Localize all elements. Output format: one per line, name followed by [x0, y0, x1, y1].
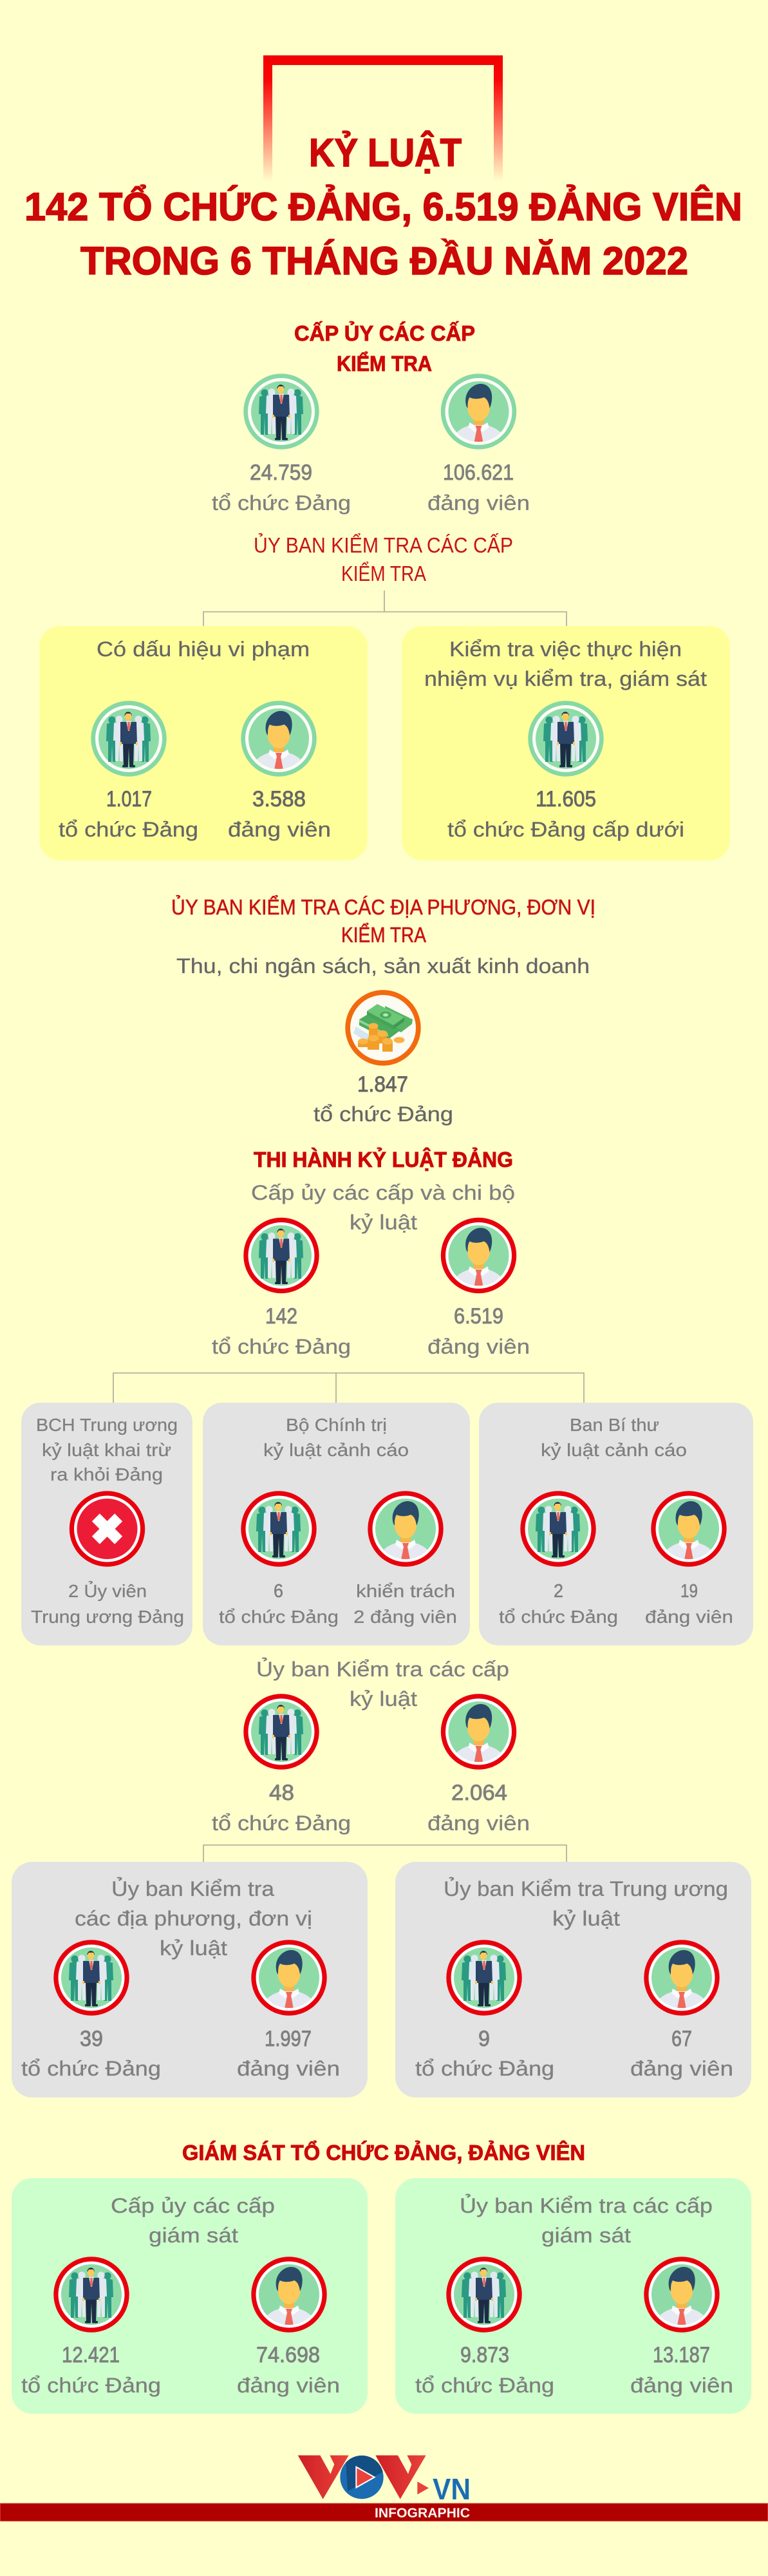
subheading	[251, 1181, 515, 1234]
stat: 1.017: tổ chức Đảng	[59, 818, 198, 841]
subheading: ủy ban kiểm tra các cấp: ỦY BAN KIỂM TRA CÁC CẤP	[254, 533, 513, 557]
stat: 106.621: 106.621	[443, 460, 514, 485]
stat: 1.997: 1.997	[265, 2027, 312, 2051]
stat: 6: tổ chức Đảng	[219, 1607, 339, 1627]
panel title	[263, 1415, 409, 1460]
stat: 2 ủy viên: Trung ương Đảng	[31, 1607, 184, 1627]
heading: ỦY BAN KIỂM TRA CÁC ĐỊA PHƯƠNG, ĐƠN VỊ	[171, 895, 595, 919]
panel title	[75, 1877, 312, 1960]
stat: 39: tổ chức Đảng	[21, 2057, 161, 2080]
panel title: kỷ luật	[552, 1907, 620, 1930]
logo text: VN: VN	[433, 2472, 471, 2506]
stat: 24.759: 24.759	[250, 460, 312, 485]
heading	[171, 895, 595, 947]
footer: VOV logo and bar	[0, 2456, 768, 2521]
stat: 1.847	[314, 1072, 453, 1126]
panel title: kỷ luật cảnh cáo	[541, 1440, 687, 1460]
heading	[294, 321, 475, 375]
stat: khiển trách: 2 đảng viên	[353, 1607, 457, 1627]
stat: 106.621: đảng viên	[427, 491, 530, 515]
stat: 74.698: 74.698	[256, 2343, 320, 2367]
heading: CẤP ỦY CÁC CẤP	[294, 321, 475, 345]
panel: có dấu hiệu vi phạm	[39, 626, 368, 860]
icon: group	[53, 1940, 129, 2016]
subheading: Cấp ủy các cấp và chi bộ	[251, 1181, 515, 1204]
panel: kiểm tra việc thực hiện nhiệm vụ	[402, 626, 730, 860]
icon: person	[368, 1491, 444, 1583]
panel title: kỷ luật cảnh cáo	[263, 1440, 409, 1460]
icon: red cross	[70, 1491, 145, 1567]
icon: group	[53, 2257, 129, 2333]
stat: 48: 48	[269, 1781, 294, 1805]
stat: 2	[499, 1581, 618, 1627]
stat: 9.873: tổ chức Đảng	[415, 2374, 554, 2397]
stat: 1.847: 1.847	[357, 1072, 408, 1097]
title: KỶ LUẬT	[309, 131, 462, 175]
section: ủy ban kiểm tra các địa phương	[171, 895, 595, 1126]
stat: 106.621	[427, 460, 530, 515]
stat: 1.997	[237, 2027, 340, 2080]
logo text: infographic: INFOGRAPHIC	[375, 2506, 470, 2521]
panel title: ra khỏi Đảng	[50, 1464, 163, 1484]
subheading: ủy ban kiểm tra các cấp: KIỂM TRA	[341, 562, 426, 585]
stat: 2 ủy viên	[31, 1580, 184, 1627]
stat: 2.064: đảng viên	[427, 1812, 530, 1835]
panel: Ban Bí thư	[479, 1403, 753, 1645]
stat: 6.519: đảng viên	[427, 1335, 530, 1358]
panel title: các địa phương, đơn vị	[75, 1907, 312, 1930]
stat: 2 ủy viên: 2 Ủy viên	[68, 1580, 147, 1601]
header frame	[263, 55, 503, 182]
stat: 1.017	[59, 787, 198, 841]
panel title: Ủy ban Kiểm tra Trung ương	[444, 1877, 728, 1900]
panel title: Ủy ban Kiểm tra	[111, 1877, 274, 1900]
stat: 19: 19	[680, 1581, 698, 1602]
icon: person	[441, 1218, 516, 1310]
title: TRONG 6 THÁNG ĐẦU NĂM 2022	[80, 239, 688, 283]
stat: 39: 39	[80, 2027, 103, 2051]
panel: cấp ủy các cấp giám sát	[12, 2178, 368, 2414]
stat: 9.873: 9.873	[460, 2343, 509, 2367]
stat: 3.588: đảng viên	[228, 818, 331, 841]
stat: 48	[212, 1781, 351, 1835]
panel title: Cấp ủy các cấp	[111, 2194, 275, 2217]
stat: 3.588	[228, 787, 331, 841]
icon: group	[91, 701, 167, 777]
stat: 24.759: tổ chức Đảng	[212, 491, 351, 515]
icon: group	[243, 1694, 319, 1770]
panel: ủy ban kiểm tra trung ương	[395, 1862, 751, 2098]
panel title	[444, 1877, 728, 1930]
icon: group	[243, 1218, 319, 1293]
stat: 6	[219, 1581, 339, 1627]
panel: Bộ Chính trị	[203, 1403, 470, 1645]
stat: 67: 67	[671, 2027, 692, 2051]
stat: khiển trách	[353, 1581, 457, 1627]
panel: ủy ban kiểm tra các cấp giám sát	[395, 2178, 751, 2414]
icon: person	[651, 1491, 727, 1583]
icon: group	[243, 374, 319, 450]
panel title	[424, 638, 707, 690]
stat: 13.187: 13.187	[653, 2343, 710, 2367]
panel title: giám sát	[149, 2224, 238, 2247]
stat: 9: 9	[478, 2027, 490, 2051]
stat: 2: 2	[554, 1581, 563, 1602]
stat: 12.421: tổ chức Đảng	[21, 2374, 161, 2397]
logo mark	[298, 2456, 429, 2499]
stat: 19: đảng viên	[645, 1607, 733, 1627]
stat: 142	[212, 1304, 351, 1358]
footer bar	[0, 2503, 768, 2521]
heading: THI HÀNH KỶ LUẬT ĐẢNG	[254, 1148, 513, 1171]
icon: group	[241, 1491, 317, 1567]
panel title	[460, 2194, 713, 2247]
stat: 9.873	[415, 2343, 554, 2397]
subheading: kỷ luật	[350, 1687, 417, 1710]
heading: KIỂM TRA	[337, 352, 432, 375]
stat: 11.605: tổ chức Đảng cấp dưới	[447, 818, 684, 841]
stat: 13.187	[630, 2343, 733, 2397]
panel title: kỷ luật khai trừ	[42, 1440, 171, 1460]
stat: 2.064	[427, 1781, 530, 1835]
stat: 24.759	[212, 460, 351, 515]
stat: 2.064: 2.064	[451, 1781, 507, 1805]
icon: group	[528, 701, 604, 777]
panel title: Ủy ban Kiểm tra các cấp	[460, 2194, 713, 2217]
panel title: Kiểm tra việc thực hiện	[449, 638, 682, 661]
stat: 39	[21, 2027, 161, 2080]
stat: 12.421: 12.421	[62, 2343, 120, 2367]
section: thi hành kỷ luật đảng	[212, 1148, 530, 1358]
icon: person	[644, 1940, 720, 2032]
icon: person	[241, 701, 317, 793]
stat: 67: đảng viên	[630, 2057, 733, 2080]
panel title	[111, 2194, 275, 2247]
icon: person	[251, 2257, 327, 2349]
description: Thu, chi ngân sách, sản xuất kinh doanh	[176, 954, 590, 978]
stat: 1.017: 1.017	[106, 787, 152, 811]
panel title: Có dấu hiệu vi phạm	[97, 638, 310, 661]
icon: group	[446, 1940, 522, 2016]
stat: 2: tổ chức Đảng	[499, 1607, 618, 1627]
subheading	[256, 1658, 509, 1710]
stat: 6.519: 6.519	[454, 1304, 503, 1329]
subheading: ủy ban kiểm tra các cấp	[254, 533, 513, 585]
section: ủy ban kiểm tra các cấp kỷ luật	[212, 1658, 530, 1835]
panel: BCH Trung ương	[21, 1403, 192, 1645]
icon: group	[520, 1491, 596, 1567]
stat: 74.698	[237, 2343, 340, 2397]
heading: KIỂM TRA	[341, 923, 426, 947]
title	[24, 131, 742, 283]
heading: giám sát: GIÁM SÁT TỔ CHỨC ĐẢNG, ĐẢNG VIÊN	[182, 2141, 585, 2164]
stat: 1.997: đảng viên	[237, 2057, 340, 2080]
icon: money and coins	[345, 990, 421, 1066]
icon: person	[441, 374, 516, 466]
icon: group	[446, 2257, 522, 2333]
stat: 48: tổ chức Đảng	[212, 1812, 351, 1835]
panel title: giám sát	[541, 2224, 631, 2247]
stat: 19	[645, 1581, 733, 1627]
stat: 13.187: đảng viên	[630, 2374, 733, 2397]
icon: person	[644, 2257, 720, 2349]
icon: person	[441, 1694, 516, 1786]
title: 142 TỔ CHỨC ĐẢNG, 6.519 ĐẢNG VIÊN	[24, 184, 742, 229]
panel title: nhiệm vụ kiểm tra, giám sát	[424, 667, 707, 690]
stat: 9	[415, 2027, 554, 2080]
stat: 1.847: tổ chức Đảng	[314, 1103, 453, 1126]
panel title: kỷ luật	[160, 1937, 227, 1960]
stat: 142: 142	[265, 1304, 297, 1329]
panel title: Ban Bí thư	[570, 1415, 659, 1435]
subheading: Ủy ban Kiểm tra các cấp	[256, 1658, 509, 1681]
panel: ủy ban kiểm tra các địa phương, đơn vị	[12, 1862, 368, 2098]
stat: 11.605	[447, 787, 684, 841]
stat: 12.421	[21, 2343, 161, 2397]
stat: 9: tổ chức Đảng	[415, 2057, 554, 2080]
panel title: Bộ Chính trị	[286, 1415, 387, 1435]
panel title: BCH Trung ương	[36, 1415, 178, 1435]
section: cấp ủy các cấp kiểm tra	[212, 321, 530, 515]
stat: 67	[630, 2027, 733, 2080]
stat: khiển trách: khiển trách	[356, 1581, 455, 1601]
panel title	[541, 1415, 687, 1460]
stat: 142: tổ chức Đảng	[212, 1335, 351, 1358]
subheading: kỷ luật	[350, 1211, 417, 1234]
panel title	[36, 1415, 178, 1484]
stat: 6: 6	[274, 1581, 283, 1602]
stat: 74.698: đảng viên	[237, 2374, 340, 2397]
stat: 3.588: 3.588	[252, 787, 306, 811]
stat: 11.605: 11.605	[536, 787, 596, 811]
icon: person	[251, 1940, 327, 2032]
stat: 6.519	[427, 1304, 530, 1358]
